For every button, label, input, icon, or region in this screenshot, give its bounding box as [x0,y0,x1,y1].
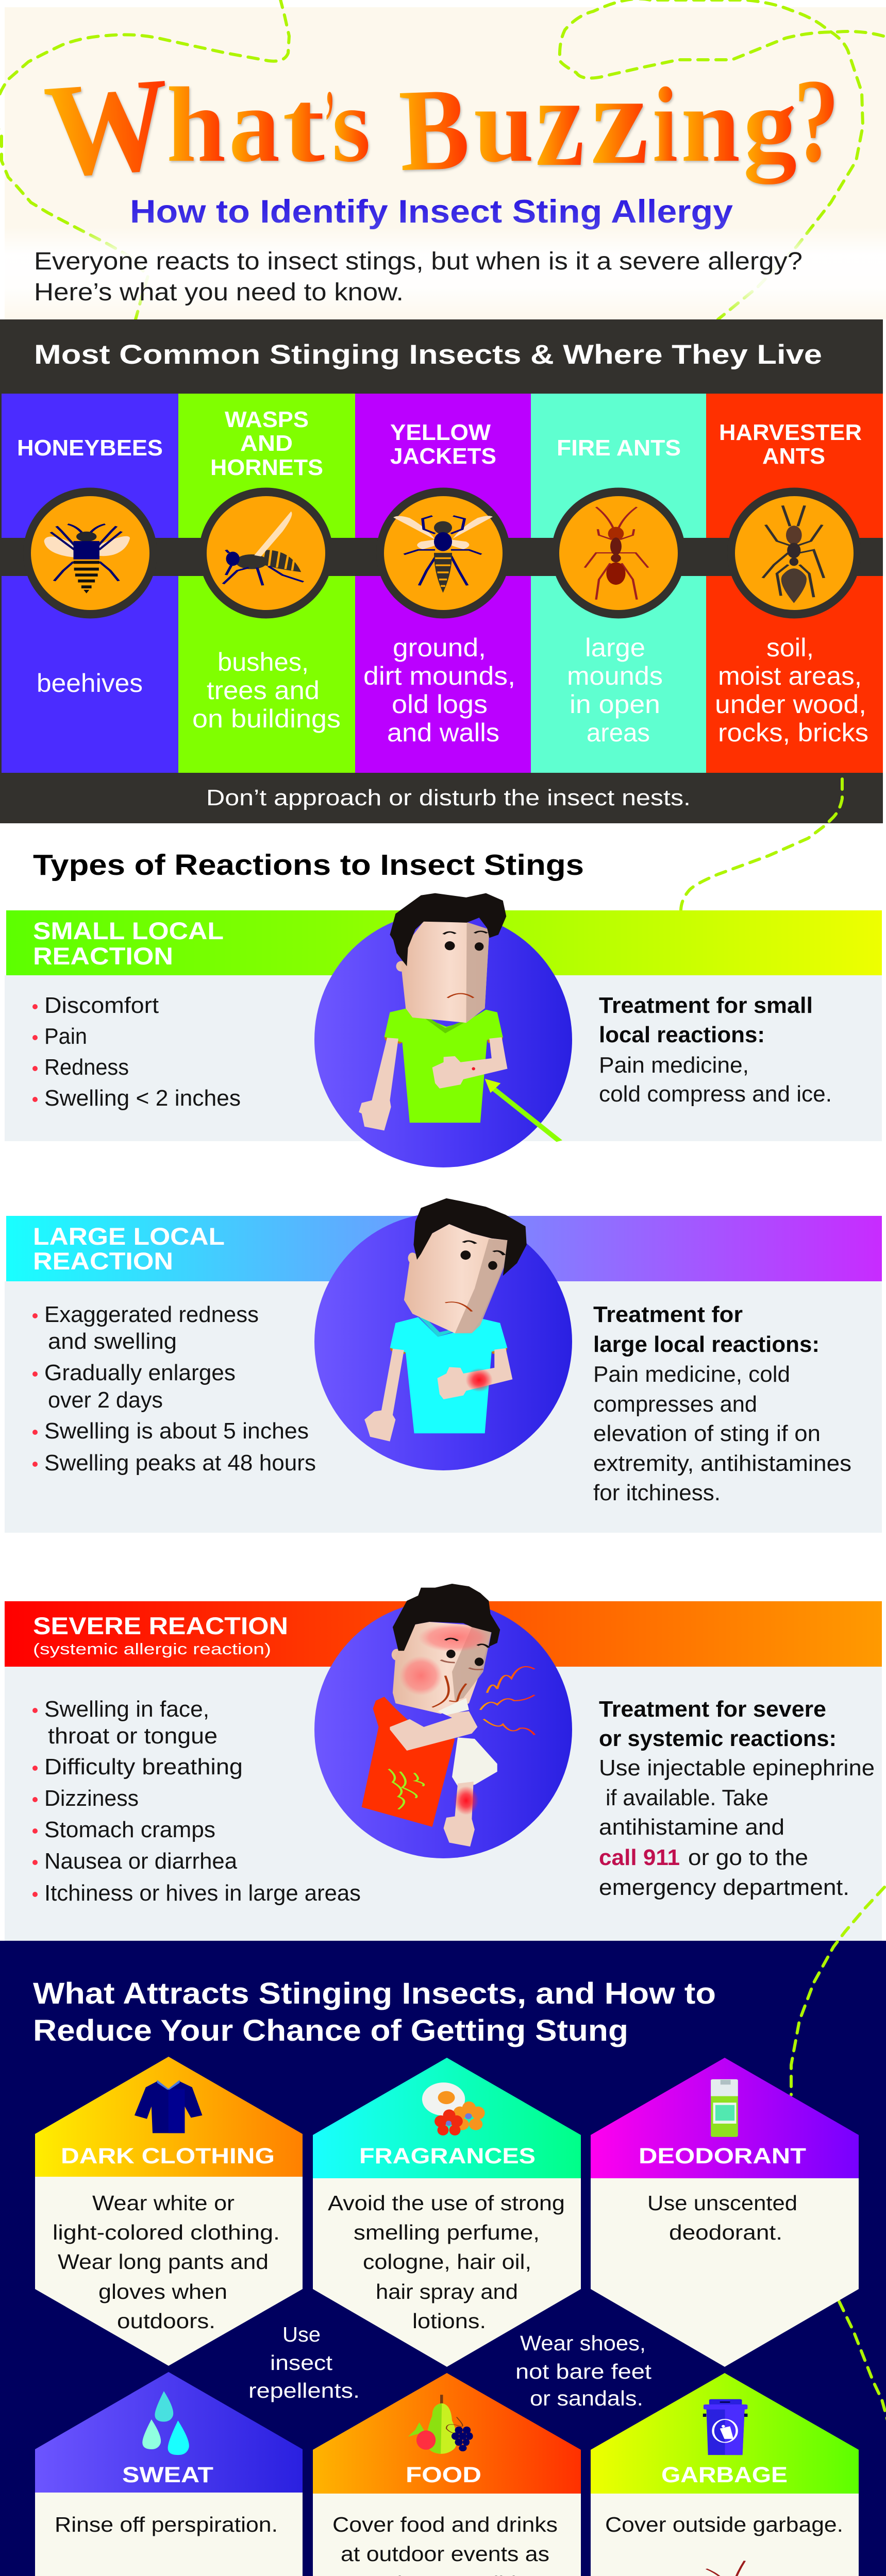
card text: outdoors. [117,2309,215,2333]
column headings: JACKETS [390,444,496,469]
column headings: HORNETS [210,455,323,480]
insect locations: mounds [567,662,663,690]
title: g [743,65,797,184]
flight path: navy section trails [740,1887,886,2576]
symptom list: small local [32,993,241,1111]
column headings [17,407,862,480]
title: n [681,65,740,184]
treatment: severe: call 911 [599,1845,680,1870]
tip: wear shoes: Wear shoes, [520,2331,646,2355]
intro glow [5,227,886,319]
intro text [34,248,803,306]
title: t [282,70,325,183]
icon: red ant [706,2561,770,2576]
treatment: large local: elevation of sting if on [593,1421,821,1446]
insect locations: large [585,633,645,662]
symptom list: severe: Swelling in face, [44,1697,209,1722]
card: fragrances [313,2058,581,2367]
title: s [332,65,371,184]
symptom list: severe: Nausea or diarrhea [44,1849,238,1874]
card text: at outdoor events as [341,2542,549,2566]
card text [647,2191,797,2244]
card text: Cover outside garbage. [605,2513,843,2536]
title: ? [794,55,839,187]
card text: hair spray and [376,2280,518,2303]
insect locations: under wood, [715,690,866,719]
icon: wasp [223,512,304,585]
card: deodorant [591,2058,859,2367]
column headings: HARVESTER [719,420,862,445]
connecting band [2,538,883,576]
panel: large local reaction [5,1198,882,1533]
flight path: dashed trail to reactions [681,779,842,910]
treatment: large local: compresses and [593,1392,757,1417]
tip: insect repellents: Use [282,2323,321,2346]
figure circle [314,1601,572,1858]
subtitle: How to Identify Insect Sting Allergy [130,194,733,230]
title: a [229,65,280,184]
column headings: FIRE ANTS [557,435,681,461]
symptom list: small local: Discomfort [44,993,159,1018]
card text: light-colored clothing. [53,2221,280,2244]
card text: gloves when [98,2280,227,2303]
figure: person with severe reaction [362,1584,534,1846]
column headings: WASPS [225,407,309,432]
tip: insect repellents [248,2323,360,2402]
icon: fruit [408,2395,473,2454]
treatment: severe [599,1697,875,1900]
figure: man with large swelling [364,1198,527,1442]
treatment: small local: cold compress and ice. [599,1081,832,1107]
body panel [5,975,882,1141]
title: B [397,64,471,196]
band: small local [6,910,882,975]
card: dark clothing [35,2057,303,2366]
symptom list: severe: Difficulty breathing [44,1754,243,1780]
intro text: Here’s what you need to know. [34,279,404,306]
insect locations: ground, [393,633,486,662]
card text: cologne, hair oil, [363,2250,531,2274]
intro text: Everyone reacts to insect stings, but when is it a severe allergy? [34,248,803,275]
treatment: large local: for itchiness. [593,1480,721,1505]
insect locations [37,633,868,747]
card text: Wear long pants and [58,2250,269,2274]
insect locations: areas [587,718,650,747]
symptom list: large local: Swelling is about 5 inches [44,1418,309,1444]
treatment: small local [599,993,832,1107]
treatment: severe: if available. Take [606,1785,768,1810]
band title: severe reaction [33,1612,288,1658]
figure: man with small sting [359,893,559,1141]
panel: what attracts insects [0,1887,886,2576]
symptom list: small local: Swelling < 2 inches [44,1086,241,1111]
insect locations: in open [570,690,660,719]
symptom list: small local: Redness [44,1055,129,1080]
insect locations: dirt mounds, [363,662,515,690]
title: W [40,49,175,205]
card: dark clothing: DARK CLOTHING [61,2144,275,2168]
tip: insect repellents: repellents. [248,2379,360,2402]
heading: most common stinging insects: Most Common Stinging Insects & Where They Live [34,340,822,370]
card: deodorant: DEODORANT [639,2144,806,2168]
tip: wear shoes [515,2331,652,2410]
band title: small local reaction [33,917,224,970]
symptom list: severe: Stomach cramps [44,1817,215,1842]
band: large local [6,1216,882,1281]
treatment: severe: antihistamine and [599,1815,784,1840]
treatment: large local [593,1302,851,1505]
figure circle [314,912,572,1167]
insect locations: soil, [766,633,814,662]
insect locations: moist areas, [718,662,862,690]
icon: shirt [135,2080,202,2133]
insect locations: beehives [37,669,143,698]
heading: what attracts [33,1977,716,2047]
card text [332,2513,558,2576]
band title: small local reaction: SMALL LOCAL [33,917,224,944]
card: food: FOOD [406,2463,481,2487]
column headings: ANTS [762,444,825,469]
symptom list: large local: Swelling peaks at 48 hours [44,1450,316,1476]
card: sweat [35,2372,303,2576]
insect locations: trees and [207,676,320,705]
band title: large local reaction: REACTION [33,1247,173,1275]
card text: Cover food and drinks [332,2513,558,2536]
card text [328,2191,565,2333]
treatment: severe: Use injectable epinephrine [599,1755,875,1781]
title: i [653,65,678,184]
insect locations: on buildings [192,704,341,733]
card text: Rinse off perspiration. [55,2513,278,2536]
band title: severe reaction: (systemic allergic reaction) [33,1640,271,1658]
icon: harvester ant [763,505,824,603]
medallions [23,487,861,618]
panel: severe reaction [5,1584,882,1941]
icon: honeybee [44,524,130,594]
symptom list: severe [32,1697,361,1906]
symptom list: large local: Exaggerated redness [44,1302,259,1327]
treatment: large local: Pain medicine, cold [593,1362,790,1387]
body panel [5,1667,882,1941]
card text: Wear white or [92,2191,235,2215]
panel: header background [5,7,886,319]
title: u [474,65,534,184]
card: sweat: SWEAT [122,2463,213,2487]
title: z [591,48,649,191]
tip: wear shoes: or sandals. [530,2386,643,2410]
band title: large local reaction: LARGE LOCAL [33,1223,225,1250]
symptom list: large local: and swelling [48,1329,177,1354]
symptom list: small local: Pain [44,1024,87,1049]
band title: small local reaction: REACTION [33,942,173,970]
treatment: severe: or go to the [688,1845,808,1870]
title: z [536,50,584,193]
nest warning: Don’t approach or disturb the insect nests. [206,785,691,810]
symptom list: severe: Itchiness or hives in large areas [44,1880,361,1906]
body panel [5,1281,882,1533]
icon: water drops [142,2391,189,2455]
symptom list: large local [32,1302,316,1476]
insect locations: bushes, [218,648,309,676]
heading: types of reactions: Types of Reactions to Insect Stings [33,849,584,882]
card: food [313,2373,581,2576]
column headings: YELLOW [390,420,491,445]
card text: smelling perfume, [354,2221,540,2244]
symptom list: large local: over 2 days [48,1387,163,1413]
symptom list: large local: Gradually enlarges [44,1360,236,1385]
figure circle [314,1213,572,1470]
icon: flowers [422,2082,485,2136]
flight path: header right dashed trail [559,0,883,319]
insect locations: old logs [392,690,488,719]
treatment: small local: Treatment for small [599,993,813,1018]
heading: what attracts: What Attracts Stinging Insects, and How to [33,1977,716,2010]
heading: what attracts: Reduce Your Chance of Getting Stung [33,2014,628,2047]
card text: deodorant. [669,2221,782,2244]
icon: deodorant can [711,2079,738,2137]
insect locations: and walls [387,718,499,747]
band: severe [5,1601,882,1667]
treatment: small local: local reactions: [599,1022,765,1047]
symptom list: severe: throat or tongue [48,1723,218,1749]
card text: Use unscented [647,2191,797,2215]
treatment: large local: extremity, antihistamines [593,1451,851,1476]
color columns [2,394,883,773]
card text: Avoid the use of strong [328,2191,565,2215]
icon: garbage can [703,2399,747,2455]
treatment: severe: or systemic reactions: [599,1726,837,1751]
card text: lotions. [412,2309,486,2333]
icon: yellow jacket [393,516,493,593]
treatment: large local: large local reactions: [593,1332,820,1357]
card: garbage: GARBAGE [661,2463,788,2487]
title: ’ [325,71,335,174]
icon: fire ant [585,507,648,600]
treatment: severe: emergency department. [599,1875,849,1900]
band title: severe reaction: SEVERE REACTION [33,1612,288,1639]
column headings: HONEYBEES [17,435,163,461]
treatment: severe: Treatment for severe [599,1697,826,1722]
tip: insect repellents: insect [270,2351,333,2375]
title [40,48,839,205]
tip: wear shoes: not bare feet [515,2360,652,2383]
insect locations: rocks, bricks [718,718,868,747]
title: h [166,65,226,184]
card text [53,2191,280,2333]
card: garbage [591,2373,859,2576]
symptom list: severe: Dizziness [44,1786,139,1811]
card: fragrances: FRAGRANCES [359,2144,536,2168]
band title: large local reaction [33,1223,225,1275]
treatment: large local: Treatment for [593,1302,743,1327]
panel: stinging insects [0,319,883,823]
panel: small local reaction [5,893,882,1167]
column headings: AND [240,431,293,456]
treatment: small local: Pain medicine, [599,1053,749,1078]
flight path: header left dashed trail [0,0,289,319]
